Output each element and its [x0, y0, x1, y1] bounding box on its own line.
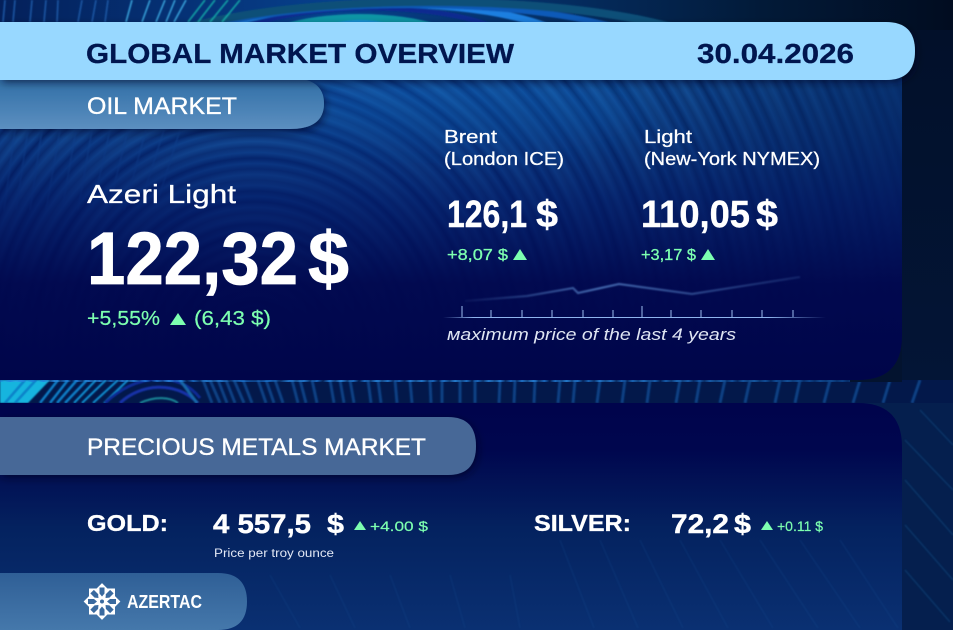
price: Light — [641, 127, 820, 264]
icon: up triangle — [354, 521, 366, 530]
line chart: four-year price: мaximum price of the last 4 years — [447, 326, 736, 344]
icon: up triangle — [761, 521, 773, 530]
icon: AZERTAC star emblem — [84, 583, 120, 620]
heading tab: precious metals market — [0, 417, 476, 475]
price: gold: $ — [327, 509, 344, 539]
price: silver: +0.11 $ — [777, 518, 823, 534]
price: Azeri Light: 122,32 — [87, 217, 298, 300]
price: gold: +4.00 $ — [370, 518, 428, 534]
price: Brent: 126,1 — [447, 194, 527, 236]
price: Azeri Light: (6,43 $) — [194, 308, 271, 330]
swirl lines behind oil panel — [0, 75, 902, 382]
price: gold: 4 557,5 — [213, 509, 311, 539]
glow on upper band — [330, 82, 632, 147]
price: Azeri Light: $ — [308, 217, 349, 300]
price: gold: GOLD: — [87, 510, 168, 536]
panel: oil market — [0, 70, 902, 380]
price: Brent — [444, 127, 564, 264]
icon: up triangle — [170, 313, 186, 325]
price: gold: Price per troy ounce — [214, 548, 334, 560]
footer tab: AZERTAC logo: AZERTAC — [127, 592, 202, 612]
heading tab: precious metals market: PRECIOUS METALS MARKET — [87, 434, 426, 461]
price: Brent: (London ICE) — [444, 149, 564, 169]
price: Brent: Brent — [444, 127, 497, 147]
price: silver: $ — [734, 509, 751, 539]
price: gold — [87, 509, 428, 560]
price: silver: 72,2 — [671, 509, 729, 539]
price: Light: +3,17 $ — [641, 247, 696, 264]
price: Light: $ — [756, 194, 778, 236]
price: silver — [534, 509, 823, 539]
date: 30.04.2026 — [697, 38, 854, 69]
icon: up triangle — [513, 249, 527, 260]
price: Brent: $ — [536, 194, 558, 236]
heading tab: oil market — [0, 78, 324, 129]
price: Light: (New-York NYMEX) — [644, 149, 820, 169]
price: Light: 110,05 — [641, 194, 750, 236]
price: Light: Light — [644, 127, 692, 147]
footer tab: AZERTAC logo — [0, 573, 247, 630]
title: GLOBAL MARKET OVERVIEW — [86, 38, 515, 69]
price: Brent: +8,07 $ — [447, 247, 508, 264]
price: Azeri Light: Azeri Light — [87, 179, 237, 209]
heading tab: oil market: OIL MARKET — [87, 93, 237, 120]
panel: precious metals market — [0, 403, 902, 630]
icon: up triangle — [701, 249, 715, 260]
strip of swirl pattern between panels — [0, 379, 953, 403]
top swirl streaks — [2, 0, 668, 22]
title bar — [0, 22, 915, 80]
price: Azeri Light: +5,55% — [87, 308, 160, 330]
line chart: four-year price — [443, 277, 826, 344]
price: silver: SILVER: — [534, 510, 631, 536]
price: Azeri Light — [87, 179, 349, 330]
